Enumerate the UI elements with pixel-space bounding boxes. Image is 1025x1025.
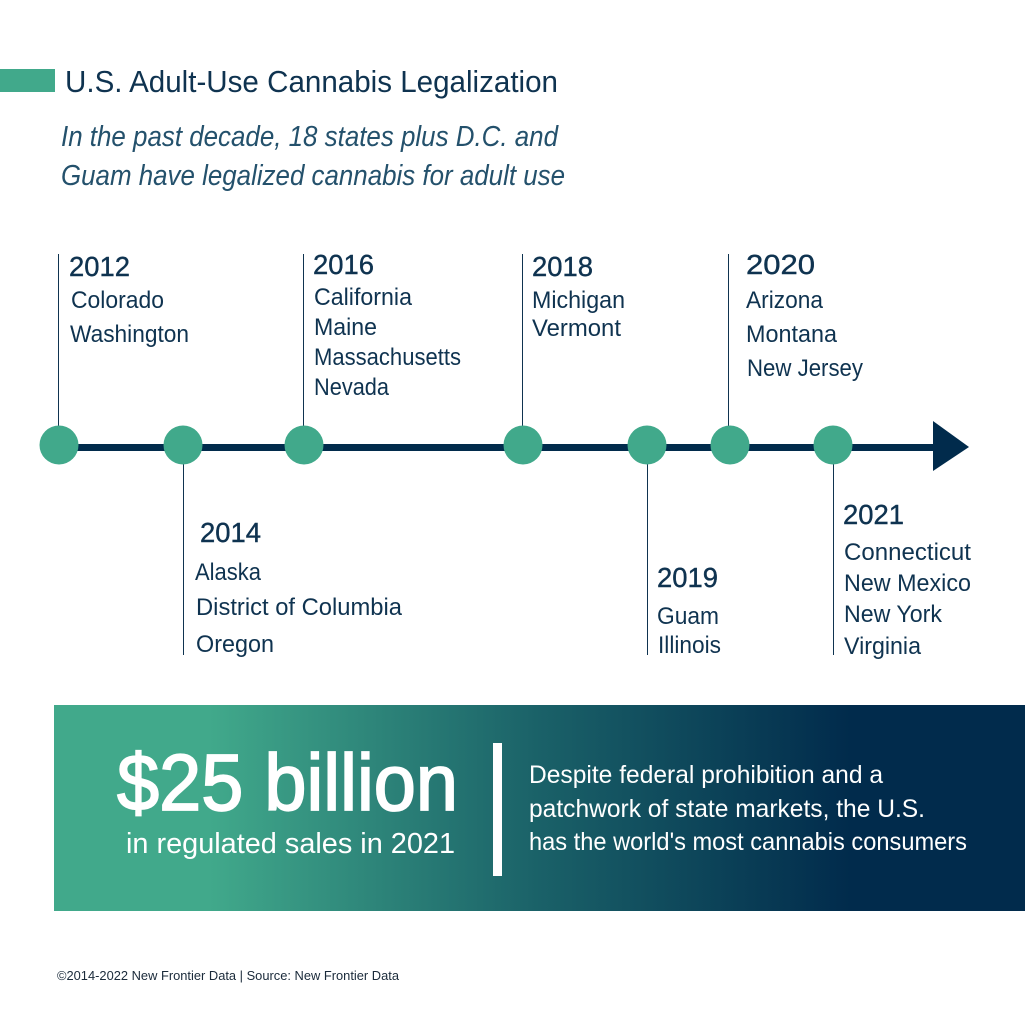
callout text: has the world's most cannabis consumers bbox=[529, 828, 967, 856]
milestone: 2018 bbox=[504, 251, 625, 464]
milestone: 2019: Illinois bbox=[658, 632, 721, 659]
subtitle: In the past decade, 18 states plus D.C. and bbox=[61, 121, 559, 153]
milestone: 2020: New Jersey bbox=[747, 355, 864, 382]
big number caption: in regulated sales in 2021 bbox=[126, 828, 455, 860]
milestone: 2021: 2021 bbox=[843, 499, 904, 530]
callout text: patchwork of state markets, the U.S. bbox=[529, 795, 925, 823]
milestone: 2020 bbox=[710, 249, 864, 464]
milestone: 2016 bbox=[284, 249, 461, 464]
milestone: 2014 bbox=[164, 426, 402, 658]
milestone: 2019 bbox=[628, 426, 721, 659]
milestone: 2016: Massachusetts bbox=[314, 344, 461, 371]
milestone: 2014: District of Columbia bbox=[196, 594, 402, 621]
milestone: 2016: 2016 bbox=[313, 249, 374, 280]
header bbox=[0, 64, 565, 192]
milestone: 2012: 2012 bbox=[69, 251, 130, 282]
title accent bar bbox=[0, 69, 55, 92]
milestone: 2018: Vermont bbox=[532, 315, 621, 342]
subtitle: Guam have legalized cannabis for adult use bbox=[61, 160, 565, 192]
milestone: 2018: 2018 bbox=[532, 251, 593, 282]
milestone: 2019: 2019 bbox=[657, 562, 718, 593]
callout text bbox=[529, 761, 967, 856]
milestone: 2014: Oregon bbox=[196, 631, 274, 658]
milestone: 2016: California bbox=[314, 284, 412, 311]
milestone: 2020: Montana bbox=[746, 321, 837, 348]
panel: sales callout bbox=[54, 705, 1025, 911]
milestone: 2014: 2014 bbox=[200, 517, 261, 548]
milestone: 2021 bbox=[814, 426, 971, 660]
milestone: 2016: Nevada bbox=[314, 374, 389, 401]
footer source: ©2014-2022 New Frontier Data | Source: New Frontier Data bbox=[57, 969, 399, 983]
callout text: Despite federal prohibition and a bbox=[529, 761, 883, 789]
milestone: 2012: Colorado bbox=[71, 287, 164, 314]
timeline bbox=[40, 249, 971, 660]
milestone: 2016: Maine bbox=[314, 314, 377, 341]
milestone: 2021: Connecticut bbox=[844, 539, 971, 566]
milestone: 2021: Virginia bbox=[844, 633, 921, 660]
big number: $25 billion bbox=[117, 738, 458, 827]
milestone: 2018: Michigan bbox=[532, 287, 625, 314]
milestone: 2021: New Mexico bbox=[844, 570, 971, 597]
gradient banner bbox=[54, 705, 1025, 911]
vertical divider bbox=[493, 743, 502, 876]
milestone: 2019: Guam bbox=[657, 603, 719, 630]
milestone: 2020: Arizona bbox=[746, 287, 823, 314]
milestone: 2012 bbox=[40, 251, 189, 464]
subtitle bbox=[61, 121, 565, 192]
milestone: 2020: 2020 bbox=[746, 249, 815, 280]
timeline axis arrow bbox=[58, 421, 969, 471]
title: U.S. Adult-Use Cannabis Legalization bbox=[65, 64, 558, 99]
milestone: 2014: Alaska bbox=[195, 559, 261, 586]
milestone: 2021: New York bbox=[844, 601, 943, 628]
milestone: 2012: Washington bbox=[70, 321, 189, 348]
